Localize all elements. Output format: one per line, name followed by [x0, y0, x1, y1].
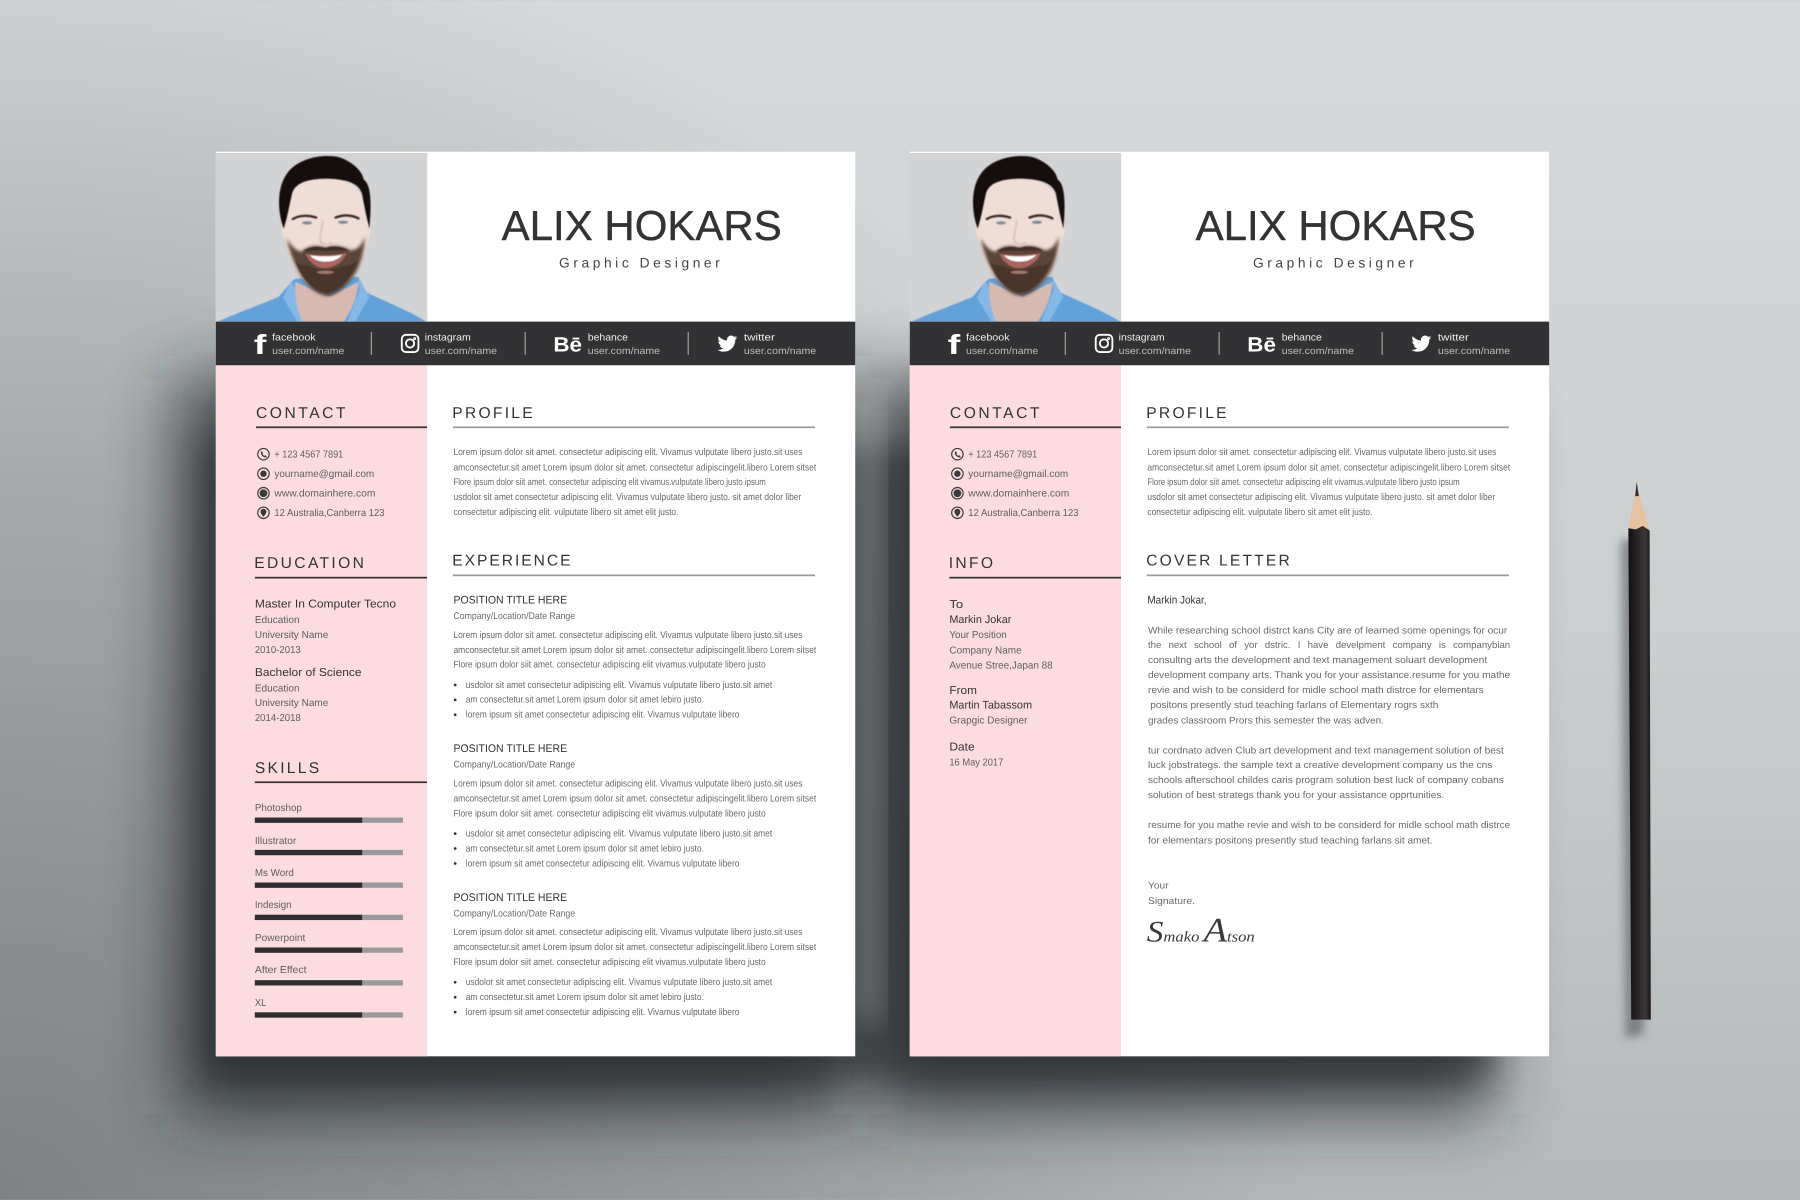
job entry 2: amconsectetur.sit amet Lorem ipsum dolor sit amet. consectetur adipiscingelit.libero Lorem sitset: [453, 792, 817, 804]
contact section: [256, 404, 427, 518]
info section: INFO: [949, 554, 993, 571]
job entry 3: amconsectetur.sit amet Lorem ipsum dolor sit amet. consectetur adipiscingelit.libero Lorem sitset: [453, 941, 817, 952]
social bar: user.com/name: [588, 345, 660, 356]
job entry 1: am consectetur.sit amet Lorem ipsum dolor sit amet lebiro justo.: [466, 694, 704, 705]
icon: instagram: [1096, 335, 1112, 352]
experience section: [452, 552, 817, 1017]
profile section: Lorem ipsum dolor sit amet. consectetur adipiscing elit. Vivamus vulputate libero justo.sit uses: [1147, 446, 1496, 457]
skills section: SKILLS: [255, 759, 319, 776]
profile section: usdolor sit amet consectetur adipiscing elit. Vivamus vulputate libero justo. sit amet dolor liber: [1147, 491, 1495, 502]
social bar: [216, 322, 855, 365]
contact section: [950, 404, 1121, 518]
education section: [254, 554, 427, 723]
icon: facebook: f: [948, 330, 962, 361]
pencil body: [1628, 526, 1651, 1020]
paper: [910, 152, 1549, 1056]
icon: instagram: [402, 335, 418, 352]
job entry 2: Company/Location/Date Range: [453, 758, 575, 770]
info section: Avenue Stree,Japan 88: [949, 659, 1053, 671]
job entry 2: usdolor sit amet consectetur adipiscing elit. Vivamus vulputate libero justo.sit amet: [466, 827, 773, 839]
profile section: PROFILE: [1146, 404, 1227, 421]
job entry 2: lorem ipsum sit amet consectetur adipiscing elit. Vivamus vulputate libero: [466, 857, 740, 869]
contact section: www.domainhere.com: [273, 488, 375, 499]
page shadows: [178, 379, 1492, 1114]
letter paragraph 1: consultng arts the development and text management soluart development: [1148, 654, 1488, 665]
education section: 2010-2013: [255, 644, 301, 655]
social bar: user.com/name: [425, 345, 497, 356]
profile section: Flore ipsum dolor siit amet. consectetur adipiscing elit vivamus.vulputate libero justo ipsum: [453, 476, 766, 488]
social bar: user.com/name: [1119, 345, 1191, 356]
pink sidebar: [910, 365, 1121, 1056]
letter paragraph 3: for elementars positons presently stud teaching farlans sit amet.: [1148, 834, 1433, 846]
profile section: amconsectetur.sit amet Lorem ipsum dolor sit amet. consectetur adipiscingelit.libero Lorem sitset: [1147, 461, 1511, 473]
profile section: [452, 404, 817, 517]
cover letter page: [909, 152, 1549, 1056]
contact section: + 123 4567 7891: [274, 448, 343, 460]
skills section: Photoshop: [255, 802, 302, 814]
profile section: usdolor sit amet consectetur adipiscing elit. Vivamus vulputate libero justo. sit amet dolor liber: [453, 491, 801, 502]
education section: EDUCATION: [254, 554, 364, 571]
skills section: [255, 759, 427, 1018]
job entry 3: Flore ipsum dolor siit amet. consectetur adipiscing elit vivamus.vulputate libero justo: [453, 956, 766, 967]
pink sidebar: [216, 365, 427, 1056]
job entry 3: Company/Location/Date Range: [453, 907, 575, 919]
letter paragraph 1: revie and wish to be considerd for midle school math distrce for elementars: [1148, 684, 1484, 695]
education section: 2014-2018: [255, 712, 301, 723]
pencil graphite point: [1635, 482, 1639, 496]
contact section: 12 Australia,Canberra 123: [968, 507, 1079, 518]
skills section: Powerpoint: [255, 932, 306, 943]
icon: twitter: [1411, 336, 1431, 352]
social bar: [910, 322, 1549, 365]
name: ALIX HOKARS: [1196, 202, 1476, 249]
social bar: behance: [1282, 331, 1322, 343]
education section: University Name: [255, 697, 328, 708]
job entry 2: POSITION TITLE HERE: [453, 743, 567, 756]
social bar: instagram: [1119, 331, 1165, 343]
info section: To: [949, 599, 964, 611]
info section: 16 May 2017: [949, 756, 1003, 768]
icon: twitter: [717, 336, 737, 352]
contact section: www.domainhere.com: [967, 488, 1069, 499]
info section: [949, 554, 1121, 768]
letter paragraph 1: [1148, 624, 1511, 726]
name: ALIX HOKARS: [502, 202, 782, 249]
letter paragraph 1: positons presently stud teaching farlans of Elementary rogrs sxth: [1150, 699, 1439, 710]
job entry 1: Company/Location/Date Range: [453, 610, 575, 621]
job entry 3: lorem ipsum sit amet consectetur adipiscing elit. Vivamus vulputate libero: [466, 1006, 740, 1017]
job entry 1: [453, 594, 817, 720]
job entry 2: Lorem ipsum dolor sit amet. consectetur adipiscing elit. Vivamus vulputate libero justo.sit uses: [453, 777, 802, 789]
icon: behance: Bē: [1247, 333, 1276, 356]
signature: Smako Atson: [1147, 912, 1255, 950]
social bar: behance: [588, 331, 628, 343]
letter paragraph 3: resume for you mathe revie and wish to be considerd for midle school math distrce: [1148, 819, 1511, 830]
education section: Bachelor of Science: [255, 667, 362, 679]
experience section: EXPERIENCE: [452, 552, 571, 569]
social bar: twitter: [744, 331, 775, 343]
cover letter section: COVER LETTER: [1146, 552, 1290, 569]
letter paragraph 1: grades classroom Prors this semester the was adven.: [1148, 714, 1384, 726]
education section: University Name: [255, 629, 328, 640]
job entry 3: [453, 892, 817, 1017]
info section: Company Name: [949, 644, 1022, 656]
profile section: amconsectetur.sit amet Lorem ipsum dolor sit amet. consectetur adipiscingelit.libero Lorem sitset: [453, 461, 817, 473]
profile section: Flore ipsum dolor siit amet. consectetur adipiscing elit vivamus.vulputate libero justo ipsum: [1147, 476, 1460, 488]
letter paragraph 1: development company arts. Thank you for your assistance.resume for you mathe: [1148, 669, 1511, 680]
job entry 2: am consectetur.sit amet Lorem ipsum dolor sit amet lebiro justo.: [466, 842, 704, 854]
social bar: user.com/name: [744, 345, 816, 356]
profile section: PROFILE: [452, 404, 533, 421]
skills section: After Effect: [255, 964, 307, 975]
skills section: Ms Word: [255, 867, 294, 878]
letter paragraph 3: [1148, 819, 1511, 846]
job entry 3: usdolor sit amet consectetur adipiscing elit. Vivamus vulputate libero justo.sit amet: [466, 976, 773, 987]
job entry 2: [453, 743, 817, 869]
job title: Graphic Designer: [559, 255, 720, 271]
job entry 1: usdolor sit amet consectetur adipiscing elit. Vivamus vulputate libero justo.sit amet: [466, 679, 773, 690]
social bar: user.com/name: [966, 345, 1039, 356]
info section: Date: [949, 741, 975, 754]
contact section: + 123 4567 7891: [968, 448, 1037, 460]
social bar: instagram: [425, 331, 471, 343]
job entry 1: Flore ipsum dolor siit amet. consectetur adipiscing elit vivamus.vulputate libero justo: [453, 659, 766, 670]
paper: [216, 152, 855, 1056]
contact section: yourname@gmail.com: [274, 468, 374, 479]
social bar: user.com/name: [272, 345, 345, 356]
letter paragraph 1: While researching school distrct kans City are of learned some openings for ocur: [1148, 624, 1508, 636]
skills section: Illustrator: [255, 835, 296, 846]
education section: Education: [255, 614, 300, 625]
job entry 3: POSITION TITLE HERE: [453, 892, 567, 904]
education section: Education: [255, 682, 300, 694]
letter paragraph 2: tur cordnato adven Club art development and text management solution of best: [1148, 744, 1505, 756]
contact section: yourname@gmail.com: [968, 468, 1068, 479]
social bar: facebook: [272, 331, 317, 343]
portrait photo: [909, 153, 1121, 322]
info section: Your Position: [949, 629, 1007, 640]
cover letter section: [1146, 552, 1511, 950]
job entry 2: Flore ipsum dolor siit amet. consectetur adipiscing elit vivamus.vulputate libero justo: [453, 807, 766, 819]
social bar: twitter: [1438, 331, 1469, 343]
letter paragraph 2: schools afterschool childes caris program solution best luck of company cobans: [1148, 774, 1504, 785]
social bar: facebook: [966, 331, 1010, 343]
info section: Grapgic Designer: [949, 714, 1028, 726]
pencil: [1621, 482, 1651, 1039]
education section: Master In Computer Tecno: [255, 598, 397, 611]
contact section: 12 Australia,Canberra 123: [274, 507, 385, 518]
icon: behance: Bē: [553, 333, 582, 356]
sign-off: [1148, 880, 1195, 907]
pencil wood tip: [1628, 492, 1650, 531]
profile section: consectetur adipiscing elit. vulputate libero sit amet elit justo.: [453, 506, 678, 517]
cover letter section: Markin Jokar,: [1147, 594, 1207, 607]
letter paragraph 2: solution of best strategs thank you for your assistance opprtunities.: [1148, 789, 1444, 800]
skills section: Indesign: [255, 899, 292, 911]
info section: Martin Tabassom: [949, 699, 1032, 712]
job entry 1: POSITION TITLE HERE: [453, 594, 567, 607]
job entry 3: am consectetur.sit amet Lorem ipsum dolor sit amet lebiro justo.: [466, 991, 704, 1002]
social bar: user.com/name: [1438, 345, 1510, 356]
skills section: XL: [255, 997, 266, 1008]
contact section: CONTACT: [950, 404, 1039, 421]
pencil shadow: [1621, 540, 1644, 1039]
letter paragraph 2: [1148, 744, 1505, 800]
profile section: consectetur adipiscing elit. vulputate libero sit amet elit justo.: [1147, 506, 1372, 517]
sign-off: Your: [1148, 880, 1169, 891]
contact section: CONTACT: [256, 404, 346, 421]
job entry 1: lorem ipsum sit amet consectetur adipiscing elit. Vivamus vulputate libero: [466, 708, 740, 720]
job entry 1: amconsectetur.sit amet Lorem ipsum dolor sit amet. consectetur adipiscingelit.libero Lorem sitset: [453, 644, 817, 655]
sign-off: Signature.: [1148, 895, 1195, 907]
social bar: user.com/name: [1282, 345, 1354, 356]
portrait photo: [215, 153, 427, 322]
job title: Graphic Designer: [1253, 255, 1414, 271]
profile section: [1146, 404, 1511, 517]
job entry 3: Lorem ipsum dolor sit amet. consectetur adipiscing elit. Vivamus vulputate libero justo.sit uses: [453, 926, 802, 938]
letter paragraph 1: the next school of yor dstric. I have develpment company is companybian: [1148, 639, 1511, 651]
info section: From: [949, 685, 977, 698]
job entry 1: Lorem ipsum dolor sit amet. consectetur adipiscing elit. Vivamus vulputate libero justo.sit uses: [453, 629, 802, 640]
letter paragraph 2: luck jobstrategs. the sample text a creative development company us the cns: [1148, 759, 1492, 770]
profile section: Lorem ipsum dolor sit amet. consectetur adipiscing elit. Vivamus vulputate libero justo.sit uses: [453, 446, 802, 457]
resume page: [215, 152, 855, 1056]
icon: facebook: f: [254, 330, 268, 361]
info section: Markin Jokar: [949, 614, 1012, 626]
